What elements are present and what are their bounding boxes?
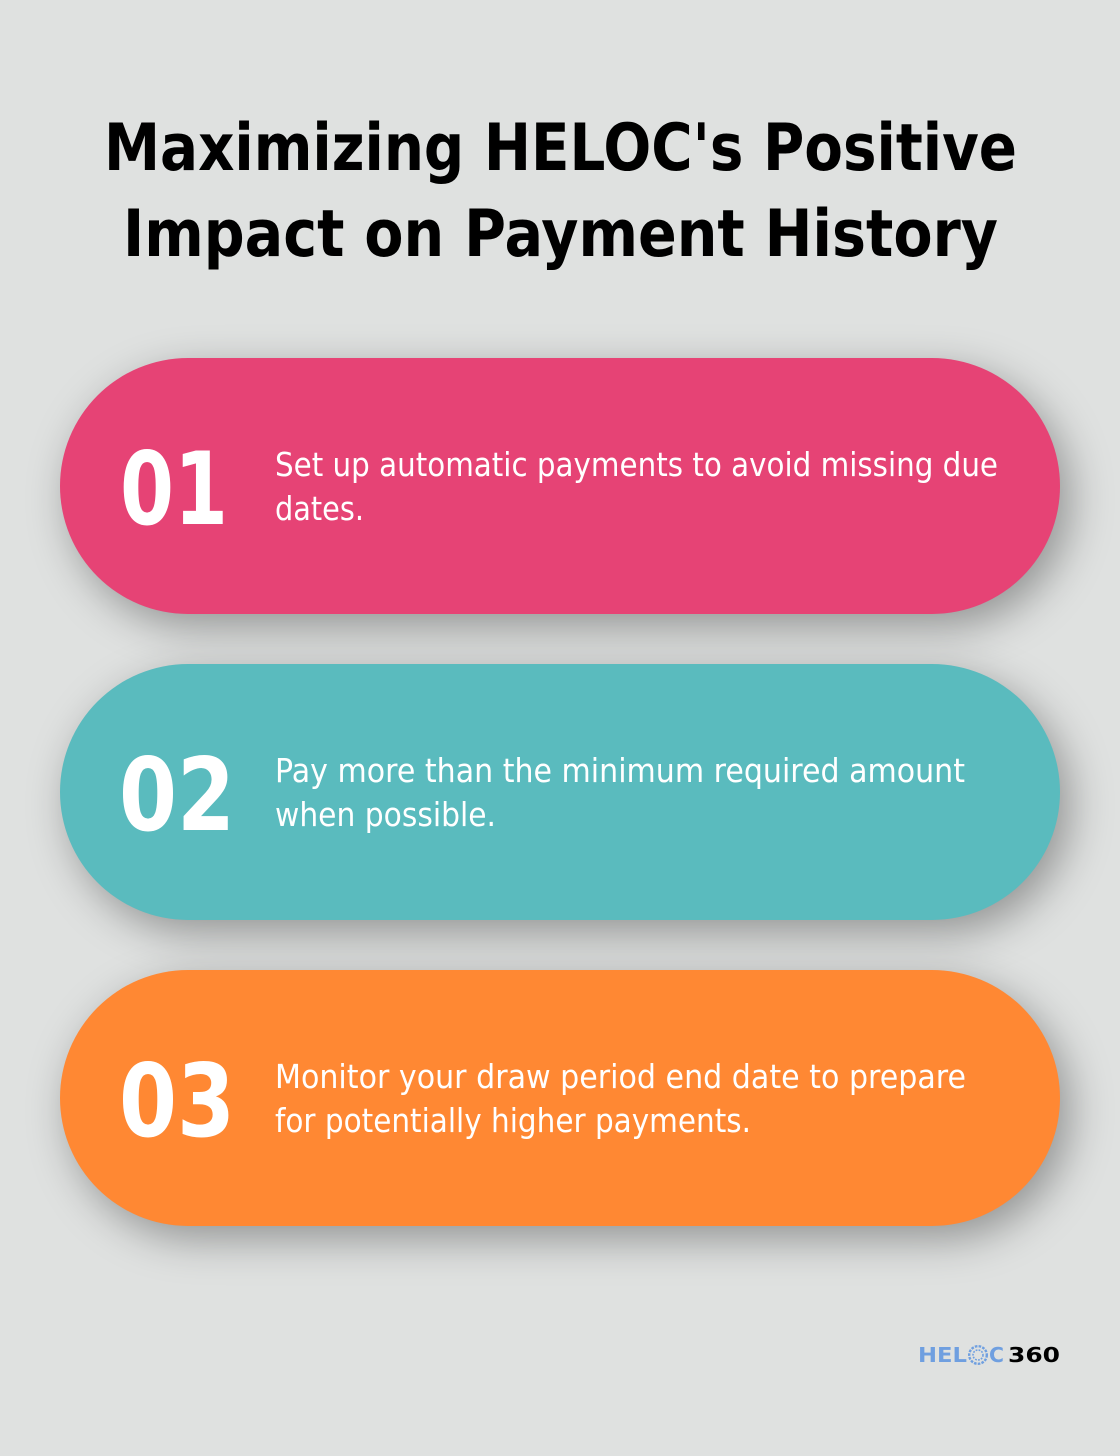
logo: HELOC360: HEL	[918, 1343, 967, 1367]
step 2 content	[119, 736, 965, 854]
logo: HELOC360: 360	[1008, 1343, 1060, 1367]
step 1 text: dates.	[275, 489, 364, 528]
icon: swirl O	[969, 1346, 987, 1364]
step 3 text: Monitor your draw period end date to prepare	[275, 1057, 966, 1096]
panel: step 2 background	[60, 664, 1060, 920]
step 2 text	[275, 751, 965, 834]
step 2 text: Pay more than the minimum required amount	[275, 751, 965, 790]
logo: HELOC360	[918, 1343, 1060, 1367]
step 3 text	[275, 1057, 966, 1140]
step 1 content	[120, 430, 998, 548]
panel: step 1 background	[60, 358, 1060, 614]
step 2 text: when possible.	[275, 795, 496, 834]
panel: step 3 background	[60, 970, 1060, 1226]
step 2 number: 02	[119, 736, 235, 854]
title	[104, 111, 1017, 272]
step 1 text	[275, 445, 998, 528]
step 1 text: Set up automatic payments to avoid missing due	[275, 445, 998, 484]
step 3 number: 03	[119, 1042, 235, 1160]
title: Impact on Payment History	[123, 197, 998, 272]
step 3 text: for potentially higher payments.	[275, 1101, 751, 1140]
logo: HELOC360: C	[989, 1343, 1004, 1367]
step 3 content	[119, 1042, 966, 1160]
step 1 number: 01	[120, 430, 228, 548]
